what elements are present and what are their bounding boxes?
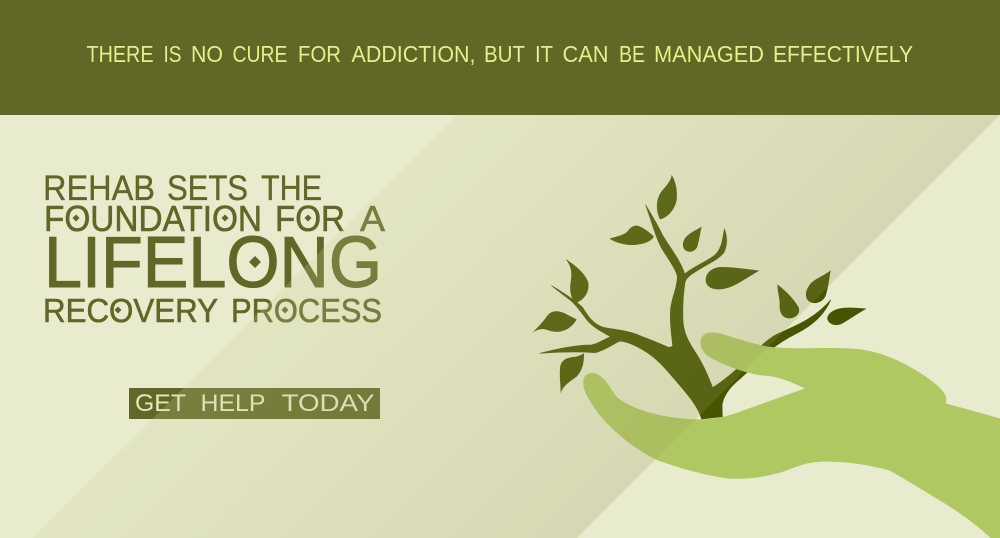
leaf bbox=[683, 227, 702, 252]
header text: CAN bbox=[562, 41, 608, 67]
leaf bbox=[806, 270, 831, 303]
main heading: PROCESS bbox=[231, 293, 382, 330]
header text: BE bbox=[619, 41, 645, 67]
header text: FOR bbox=[298, 41, 341, 67]
leaf bbox=[532, 311, 577, 333]
header text: THERE bbox=[86, 41, 154, 67]
diagonal translucent band bbox=[33, 115, 1000, 538]
main heading: REHAB bbox=[43, 169, 155, 208]
header text: ADDICTION, bbox=[352, 41, 476, 67]
header text: CURE bbox=[232, 41, 288, 67]
header text: NO bbox=[191, 41, 223, 67]
leaf bbox=[827, 308, 867, 325]
button: get help today: HELP bbox=[200, 390, 266, 417]
header text: IT bbox=[535, 41, 553, 67]
leaf bbox=[560, 353, 584, 393]
header text bbox=[86, 41, 913, 67]
leaf bbox=[657, 175, 677, 219]
hand bbox=[583, 332, 1000, 538]
tree with leaves bbox=[532, 175, 867, 419]
main heading: A bbox=[360, 198, 385, 239]
main heading: THE bbox=[261, 169, 322, 208]
button: get help today bbox=[129, 388, 380, 419]
main heading: FOR bbox=[275, 198, 345, 239]
leaf bbox=[609, 226, 654, 245]
main heading: SETS bbox=[167, 169, 248, 208]
main heading: RECOVERY bbox=[43, 293, 218, 330]
main heading: FOUNDATION bbox=[44, 198, 262, 239]
main heading bbox=[43, 169, 385, 330]
leaf bbox=[706, 267, 759, 289]
header text: IS bbox=[164, 41, 182, 67]
header text: EFFECTIVELY bbox=[773, 41, 913, 67]
leaf bbox=[777, 284, 799, 318]
illustration: tree held in a hand bbox=[532, 175, 1000, 538]
header text: BUT bbox=[484, 41, 525, 67]
button: get help today: GET bbox=[135, 390, 186, 417]
button: get help today: TODAY bbox=[282, 390, 374, 417]
main heading: LIFELONG bbox=[44, 223, 382, 303]
header text: MANAGED bbox=[654, 41, 764, 67]
header bar bbox=[0, 0, 1000, 115]
leaf bbox=[566, 259, 589, 303]
tree trunk and branches bbox=[540, 205, 831, 419]
